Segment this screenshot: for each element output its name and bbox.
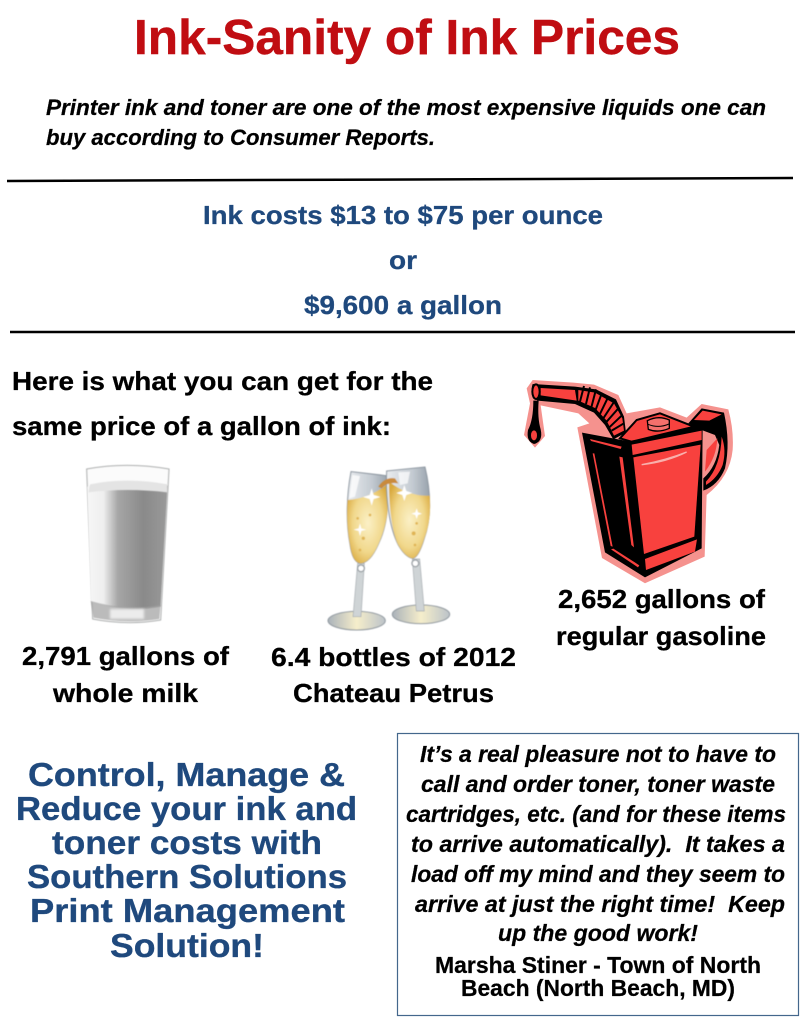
intro text — [46, 95, 766, 150]
intro text: buy according to Consumer Reports. — [46, 125, 435, 150]
comparison heading: Here is what you can get for the — [12, 366, 433, 396]
attribution: Beach (North Beach, MD) — [461, 975, 735, 1001]
quote: cartridges, etc. (and for these items — [406, 801, 786, 827]
intro text: Printer ink and toner are one of the most expensive liquids one can — [46, 95, 766, 120]
icon: glass of milk — [87, 465, 169, 623]
front — [633, 445, 701, 554]
icon: gas can — [524, 380, 733, 583]
cap — [647, 418, 669, 431]
label: milk: whole milk — [52, 678, 199, 708]
quote: to arrive automatically). It takes a — [411, 831, 785, 857]
call to action: Print Management — [30, 892, 345, 929]
left glass — [328, 472, 389, 630]
call to action: Reduce your ink and — [16, 790, 357, 827]
label: milk — [22, 641, 229, 708]
comparison heading — [12, 366, 433, 441]
label: gasoline — [556, 584, 766, 651]
call to action — [16, 756, 357, 964]
label: champagne: Chateau Petrus — [293, 678, 494, 708]
side highlights — [619, 457, 634, 547]
quote: call and order toner, toner waste — [421, 771, 775, 797]
ink cost statement: $9,600 a gallon — [304, 290, 502, 320]
top — [620, 413, 694, 442]
quote: load off my mind and they seem to — [411, 861, 785, 887]
call to action: Solution! — [110, 927, 264, 964]
right glass — [378, 467, 450, 624]
drip — [528, 401, 541, 444]
call to action: Control, Manage & — [28, 756, 345, 793]
quote: It’s a real pleasure not to have to — [420, 741, 776, 767]
ink cost statement: Ink costs $13 to $75 per ounce — [203, 200, 603, 230]
label: milk: 2,791 gallons of — [22, 641, 229, 671]
handle — [688, 408, 728, 491]
label: champagne — [271, 642, 516, 708]
attribution — [435, 952, 761, 1001]
ink cost statement — [203, 200, 603, 320]
quote: up the good work! — [498, 920, 698, 946]
label: gasoline: 2,652 gallons of — [558, 584, 765, 614]
quote — [406, 741, 786, 946]
comparison heading: same price of a gallon of ink: — [12, 411, 391, 441]
title: Ink-Sanity of Ink Prices — [134, 11, 680, 65]
quote: arrive at just the right time! Keep — [415, 891, 785, 917]
call to action: toner costs with — [52, 824, 322, 861]
icon: champagne glasses — [328, 467, 450, 630]
label: gasoline: regular gasoline — [556, 621, 766, 651]
attribution: Marsha Stiner - Town of North — [435, 952, 761, 978]
call to action: Southern Solutions — [27, 858, 347, 895]
label: champagne: 6.4 bottles of 2012 — [271, 642, 516, 672]
halo — [524, 380, 733, 583]
ink cost statement: or — [389, 245, 417, 275]
testimonial box — [398, 734, 798, 1016]
spout — [532, 384, 626, 439]
body black — [582, 425, 703, 577]
